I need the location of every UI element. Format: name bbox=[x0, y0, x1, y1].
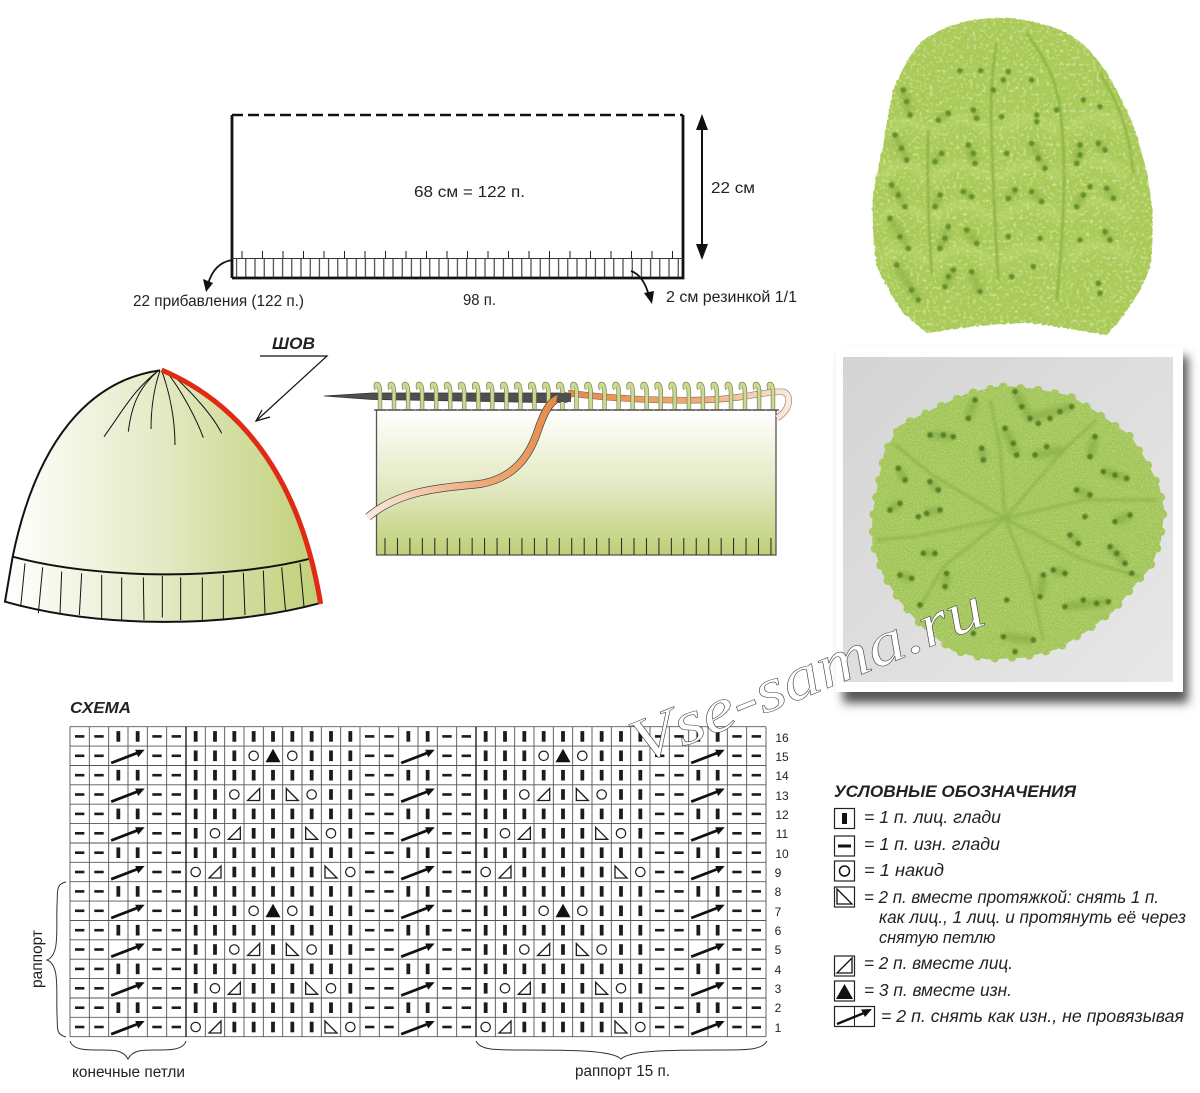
hat shape in zoom coordinates bbox=[5, 370, 321, 622]
increases label: 22 прибавления (122 п.) bbox=[133, 293, 304, 310]
left brace bbox=[47, 882, 66, 1037]
panel: pattern rectangle schematic bbox=[133, 114, 797, 310]
yarn along the edge bbox=[568, 392, 789, 418]
row numbers: 1 bbox=[775, 1021, 782, 1035]
legend: knit: = 1 п. лиц. глади bbox=[864, 807, 1001, 827]
photo: knitted beret in framed picture bbox=[836, 347, 1188, 703]
seam label: ШОВ bbox=[272, 335, 315, 353]
row numbers: 13 bbox=[775, 789, 789, 803]
row numbers: 5 bbox=[775, 943, 782, 957]
legend: three purl together: = 3 п. вместе изн. bbox=[864, 980, 1012, 1000]
legend: purl: = 1 п. изн. глади bbox=[864, 834, 1000, 854]
white frame bbox=[836, 347, 1183, 692]
fabric rectangle bbox=[376, 410, 776, 555]
row numbers: 10 bbox=[775, 847, 789, 861]
panel: seamed hat illustration bbox=[5, 335, 327, 622]
legend: slip decrease: = 2 п. вместе протяжкой: снять 1 п. bbox=[864, 887, 1159, 907]
legend: slip two: = 2 п. снять как изн., не провязывая bbox=[881, 1006, 1184, 1026]
seam arrow bbox=[256, 356, 327, 421]
yarn tail bbox=[368, 397, 568, 517]
heading: chart: СХЕМА bbox=[70, 700, 131, 717]
chart grid bbox=[70, 727, 766, 1037]
legend: slip decrease: как лиц., 1 лиц. и протянуть её через bbox=[879, 907, 1186, 927]
bottom brace: end stitches bbox=[70, 1041, 186, 1059]
row numbers: 6 bbox=[775, 924, 782, 938]
legend: slip decrease bbox=[834, 887, 1186, 947]
row numbers: 16 bbox=[775, 731, 789, 745]
photo: knitted hat bbox=[873, 18, 1153, 335]
bottom stitch count: 98 п. bbox=[463, 292, 496, 309]
legend: yarn over: = 1 накид bbox=[864, 860, 944, 880]
row numbers: 11 bbox=[776, 827, 789, 841]
hat ribs and lace eyelets, zoom coordinates bbox=[880, 33, 1133, 300]
legend: yarn over bbox=[834, 860, 944, 881]
needle bbox=[324, 393, 571, 403]
increase arrow bbox=[203, 260, 232, 292]
rectangle outline with dashed top bbox=[232, 115, 683, 278]
height label: 22 см bbox=[711, 180, 755, 197]
frame shadow bbox=[843, 356, 1188, 703]
row numbers: 3 bbox=[775, 982, 782, 996]
row numbers: 12 bbox=[775, 808, 789, 822]
panel: legend bbox=[834, 782, 1186, 1026]
red seam bbox=[162, 370, 321, 604]
row numbers: 4 bbox=[775, 963, 782, 977]
rib arrow bbox=[631, 271, 654, 304]
row numbers: 14 bbox=[775, 769, 789, 783]
ribbing band bbox=[232, 251, 683, 278]
rib ticks bbox=[379, 538, 775, 555]
bottom brace: repeat bbox=[476, 1041, 767, 1059]
rotated repeat label: раппорт bbox=[29, 930, 46, 988]
end stitches label: конечные петли bbox=[72, 1064, 185, 1081]
legend heading: УСЛОВНЫЕ ОБОЗНАЧЕНИЯ bbox=[834, 782, 1077, 801]
width label: 68 см = 122 п. bbox=[414, 184, 525, 201]
knitting chart bbox=[29, 727, 789, 1081]
chart symbols bbox=[75, 731, 761, 1034]
row numbers: 2 bbox=[775, 1001, 782, 1015]
legend: knit two together: = 2 п. вместе лиц. bbox=[864, 953, 1013, 973]
row numbers bbox=[775, 731, 789, 1035]
beret body, zoom coordinates bbox=[873, 387, 1163, 658]
height arrow bbox=[696, 114, 708, 260]
row numbers: 9 bbox=[775, 866, 782, 880]
row numbers: 15 bbox=[775, 750, 789, 764]
stitch loops bbox=[374, 384, 779, 410]
legend: slip decrease: снятую петлю bbox=[879, 929, 995, 947]
row numbers: 7 bbox=[775, 905, 782, 919]
row numbers: 8 bbox=[775, 885, 782, 899]
grey photo background bbox=[843, 357, 1173, 682]
panel: sewing the top with needle bbox=[324, 384, 789, 555]
rib label: 2 см резинкой 1/1 bbox=[666, 289, 797, 306]
watermark: Vse-sama.ru bbox=[620, 573, 994, 777]
repeat stitches label: раппорт 15 п. bbox=[575, 1063, 670, 1080]
